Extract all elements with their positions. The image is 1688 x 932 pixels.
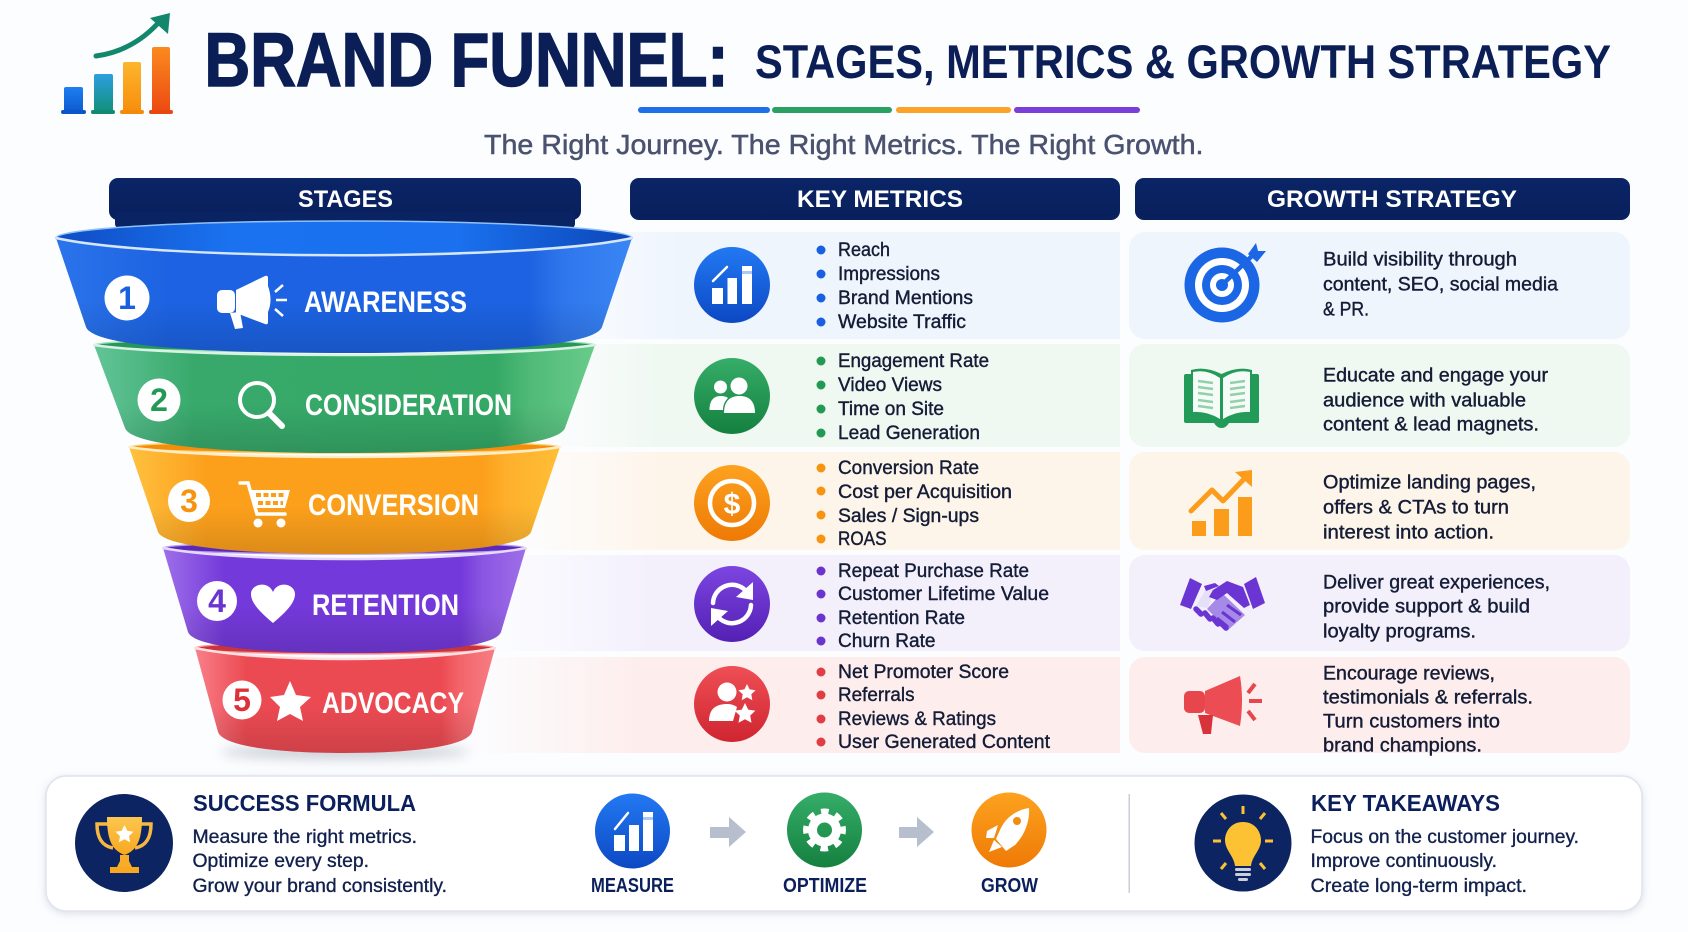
list: conversion metrics [816, 457, 1012, 550]
icon: people [694, 358, 770, 434]
panel: consideration metrics [540, 344, 1120, 447]
icon: white megaphone [217, 276, 287, 329]
text: conversion strategy: interest into action. [1323, 522, 1494, 544]
number badge 5: 5 [233, 682, 251, 718]
funnel tier 4: retention [163, 542, 526, 653]
text: advocacy strategy: brand champions. [1323, 734, 1482, 756]
list: conversion metrics: Cost per Acquisition [838, 481, 1012, 503]
step: measure: MEASURE [591, 875, 674, 897]
icon: growth chart [1191, 470, 1252, 536]
heading: growth strategy: GROWTH STRATEGY [1267, 186, 1517, 213]
text: consideration strategy: content & lead magnets. [1323, 414, 1539, 436]
icon: light bulb [1194, 794, 1292, 892]
text: success formula: Optimize every step. [192, 850, 369, 872]
heading: key metrics: KEY METRICS [797, 186, 963, 213]
panel: retention metrics [490, 555, 1120, 652]
text: awareness strategy: & PR. [1323, 298, 1369, 320]
list: advocacy metrics: Reviews & Ratings [838, 708, 996, 730]
step: optimize [783, 792, 867, 897]
text: key takeaways: KEY TAKEAWAYS [1311, 790, 1500, 816]
icon: shopping cart [240, 483, 290, 528]
number badge 1: 1 [118, 280, 136, 316]
list: consideration metrics: Lead Generation [838, 422, 980, 444]
list: consideration metrics: Time on Site [838, 398, 944, 420]
text: key takeaways: Improve continuously. [1310, 850, 1497, 872]
text: consideration strategy: Educate and engage your [1323, 364, 1548, 386]
label: retention: RETENTION [312, 589, 459, 622]
text: conversion strategy: offers & CTAs to turn [1323, 496, 1509, 518]
list: awareness metrics: Website Traffic [838, 311, 966, 333]
step: grow: GROW [981, 875, 1038, 897]
text: consideration strategy: audience with valuable [1323, 390, 1526, 412]
funnel tier 2: consideration [94, 338, 595, 453]
text: conversion strategy: Optimize landing pages, [1323, 472, 1536, 494]
icon: star [270, 681, 311, 721]
divider [1128, 794, 1130, 893]
list: consideration metrics: Video Views [838, 374, 942, 396]
icon: target with arrow [1184, 243, 1266, 322]
text: advocacy strategy: Turn customers into [1323, 710, 1500, 732]
text: success formula: SUCCESS FORMULA [193, 790, 416, 816]
icon: person with stars [694, 666, 770, 742]
title [204, 18, 1611, 103]
panel: awareness metrics [560, 232, 1120, 339]
panel: consideration strategy [1129, 344, 1630, 447]
text: key takeaways: Create long-term impact. [1310, 875, 1527, 897]
list: advocacy metrics: User Generated Content [838, 731, 1051, 753]
panel: conversion strategy [1129, 452, 1630, 550]
panel: conversion metrics [515, 452, 1120, 550]
number badge 1 [104, 276, 150, 320]
panel: advocacy strategy [1129, 657, 1630, 756]
panel: retention strategy [1129, 555, 1630, 651]
funnel tier 1: awareness [56, 221, 632, 353]
list: conversion metrics: Conversion Rate [838, 457, 979, 479]
icon: handshake [1180, 577, 1265, 630]
list: retention metrics: Retention Rate [838, 607, 965, 629]
icon: dollar coin: $ [724, 488, 741, 521]
arrow: optimize to grow [899, 817, 934, 847]
label: conversion: CONVERSION [308, 489, 479, 522]
icon: magnifier [240, 383, 282, 426]
text: retention strategy: Deliver great experiences, [1323, 572, 1550, 594]
number badge 3: 3 [180, 483, 198, 519]
heading: stages: STAGES [298, 186, 393, 213]
text: advocacy strategy: testimonials & referrals. [1323, 686, 1533, 708]
text: retention strategy: loyalty programs. [1323, 620, 1476, 642]
list: retention metrics: Customer Lifetime Value [838, 583, 1049, 605]
number badge 4 [197, 581, 237, 621]
list: retention metrics [816, 560, 1049, 652]
list: awareness metrics: Brand Mentions [838, 287, 973, 309]
text: awareness strategy: content, SEO, social media [1323, 274, 1558, 296]
subtitle: The Right Journey. The Right Metrics. The Right Growth. [484, 129, 1204, 160]
icon: refresh [694, 566, 770, 642]
text: success formula: Measure the right metrics. [192, 826, 417, 848]
label: advocacy: ADVOCACY [322, 687, 464, 720]
logo icon: rising bars with arrow [61, 13, 173, 114]
number badge 4: 4 [208, 583, 226, 619]
list: conversion metrics: ROAS [838, 528, 886, 550]
number badge 5 [222, 680, 262, 720]
step: optimize: OPTIMIZE [783, 875, 867, 897]
number badge 2: 2 [150, 382, 168, 418]
title: BRAND FUNNEL: [204, 18, 728, 103]
funnel tier 3: conversion [129, 441, 560, 554]
text: key takeaways [1310, 790, 1579, 897]
list: consideration metrics: Engagement Rate [838, 350, 989, 372]
list: advocacy metrics: Referrals [838, 684, 915, 706]
icon: red megaphone [1184, 676, 1262, 734]
panel: awareness strategy [1129, 232, 1630, 339]
icon: open book [1184, 369, 1259, 428]
list: conversion metrics: Sales / Sign-ups [838, 505, 979, 527]
icon: bar chart [694, 247, 770, 323]
step: grow [972, 792, 1046, 897]
step: measure [591, 794, 674, 897]
text: awareness strategy: Build visibility through [1323, 248, 1517, 270]
list: advocacy metrics [816, 661, 1051, 753]
label: consideration: CONSIDERATION [305, 389, 512, 422]
list: awareness metrics: Impressions [838, 263, 940, 285]
panel: advocacy metrics [465, 657, 1120, 753]
list: retention metrics: Churn Rate [838, 630, 936, 652]
heading: growth strategy [1135, 178, 1630, 220]
panel: bottom summary bar [46, 776, 1642, 911]
text: success formula [192, 790, 447, 897]
title underline [638, 107, 1140, 113]
list: awareness metrics: Reach [838, 239, 890, 261]
list: advocacy metrics: Net Promoter Score [838, 661, 1009, 683]
funnel tier 5: advocacy [195, 642, 495, 759]
text: advocacy strategy: Encourage reviews, [1323, 662, 1495, 684]
list: awareness metrics [816, 239, 973, 333]
list: retention metrics: Repeat Purchase Rate [838, 560, 1029, 582]
list: consideration metrics [816, 350, 989, 444]
number badge 2 [138, 378, 180, 422]
text: retention strategy: provide support & build [1323, 596, 1530, 618]
text: key takeaways: Focus on the customer journey. [1310, 826, 1579, 848]
icon: trophy [75, 794, 173, 892]
label: awareness: AWARENESS [304, 286, 467, 319]
number badge 3 [168, 480, 210, 522]
text: success formula: Grow your brand consistently. [192, 875, 447, 897]
heading: stages [109, 178, 581, 228]
arrow: measure to optimize [710, 817, 746, 847]
heading: key metrics [630, 178, 1120, 220]
icon: heart [251, 585, 295, 623]
icon: dollar coin [694, 465, 770, 541]
